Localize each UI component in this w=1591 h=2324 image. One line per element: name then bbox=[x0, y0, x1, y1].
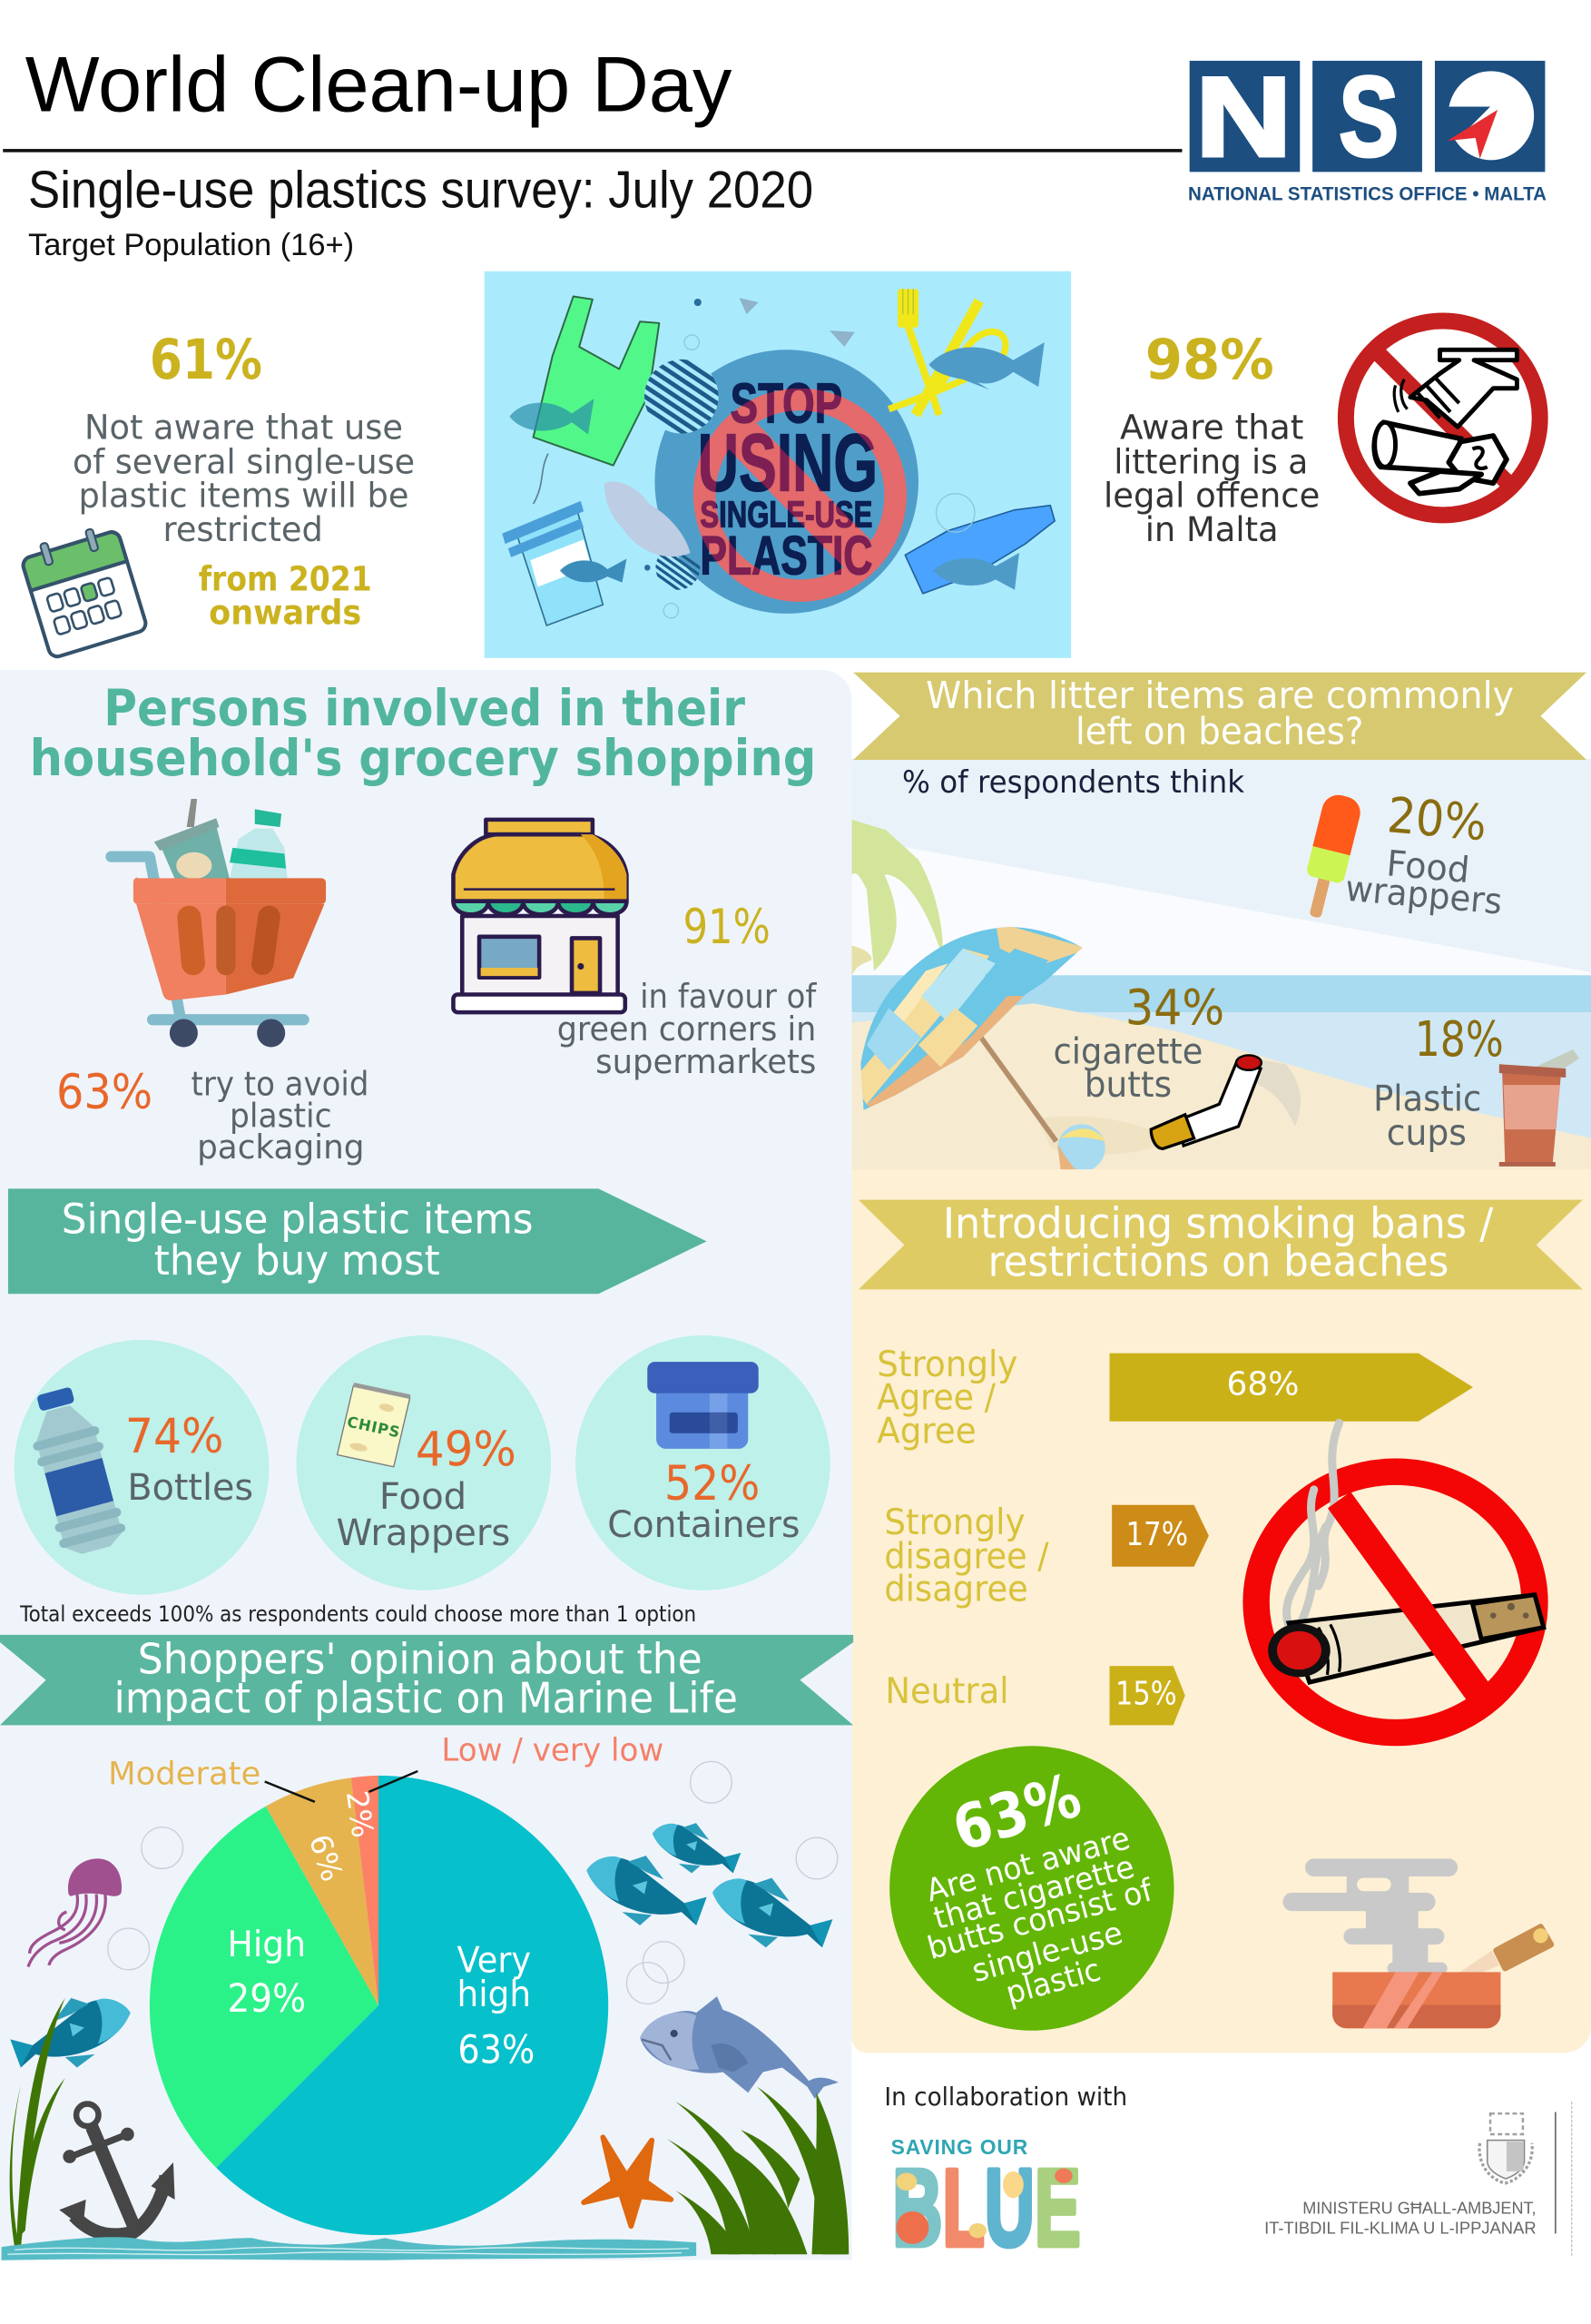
heading: litter ribbon bbox=[853, 673, 1586, 760]
slogan: PLASTIC bbox=[700, 525, 872, 586]
slice: moderate 6% bbox=[266, 1777, 378, 2005]
bar row: disagree 17%: Strongly bbox=[884, 1502, 1025, 1543]
item: containers bbox=[575, 1335, 830, 1590]
NSO logo: S bbox=[1340, 54, 1399, 180]
stat: 91% green corners: green corners in bbox=[557, 1009, 816, 1049]
fish top right bbox=[928, 342, 1045, 389]
text: 34% cigarette butts: cigarette bbox=[1054, 1031, 1203, 1072]
bar row: agree 68%: Agree / bbox=[877, 1378, 997, 1419]
heading: litter ribbon: Which litter items are commonly bbox=[926, 674, 1514, 717]
stat: 61% not aware: of several single-use bbox=[73, 442, 415, 482]
slice: low 2% bbox=[351, 1776, 378, 2005]
heading ribbon: smoking bans: Introducing smoking bans / bbox=[943, 1198, 1494, 1247]
stat: 91% green corners: supermarkets bbox=[595, 1042, 816, 1081]
item: food wrappers bbox=[296, 1335, 551, 1590]
icon: ice lolly bbox=[1296, 792, 1364, 921]
icon: coat of arms bbox=[1479, 2113, 1532, 2183]
stat: 63% avoid plastic: 63% bbox=[56, 1066, 152, 1120]
callout: 63% not aware: plastic bbox=[1002, 1952, 1105, 2012]
stat: 61% not aware: 61% bbox=[150, 329, 262, 392]
text: 34% cigarette butts: 34% bbox=[1125, 979, 1224, 1036]
item: food wrappers: Food bbox=[379, 1476, 466, 1518]
icon: ashtray bbox=[1282, 1858, 1551, 2028]
bar row: disagree 17%: 17% bbox=[1125, 1516, 1188, 1553]
heading ribbon: marine life: impact of plastic on Marine Life bbox=[114, 1674, 738, 1723]
heading: litter ribbon: left on beaches? bbox=[1075, 710, 1363, 753]
text: 34% cigarette butts bbox=[1054, 979, 1224, 1106]
item: bottles: 74% bbox=[125, 1410, 223, 1464]
heading ribbon: smoking bans bbox=[859, 1198, 1583, 1289]
sea bbox=[852, 975, 1591, 1012]
icon: shopping cart bbox=[111, 799, 326, 1047]
fish by cup bbox=[560, 559, 626, 583]
bar row: agree 68%: Strongly bbox=[877, 1344, 1017, 1385]
heading arrow: items they buy: they buy most bbox=[154, 1236, 440, 1285]
label: high: 29% bbox=[228, 1977, 306, 2022]
stat: 98% aware: in Malta bbox=[1145, 509, 1279, 549]
bar row: agree 68%: 68% bbox=[1226, 1365, 1299, 1403]
title: World Clean-up Day bbox=[25, 41, 732, 128]
striped discs bbox=[644, 359, 719, 434]
heading: grocery shopping bbox=[30, 679, 816, 788]
leader lines bbox=[265, 1771, 417, 1802]
panel: beach scene bbox=[851, 759, 1591, 1169]
text: 18% plastic cups: cups bbox=[1387, 1113, 1467, 1154]
title rule bbox=[3, 149, 1183, 153]
single-use cup bbox=[534, 454, 548, 504]
stat: 61% not aware: onwards bbox=[209, 592, 361, 632]
label: moderate: Moderate bbox=[108, 1757, 260, 1793]
icon: cigarette butt bbox=[1151, 1055, 1301, 1148]
text: 20% food wrappers: wrappers bbox=[1344, 869, 1504, 923]
stat: 61% not aware: Not aware that use bbox=[84, 407, 403, 447]
bar row: disagree 17%: disagree / bbox=[884, 1536, 1049, 1577]
label: very high: high bbox=[457, 1974, 531, 2015]
ministry name: IT-TIBDIL FIL-KLIMA U L-IPPJANAR bbox=[1264, 2218, 1537, 2237]
stat: 63% avoid plastic: try to avoid bbox=[192, 1065, 368, 1104]
text: 20% food wrappers bbox=[1344, 786, 1504, 923]
stat: 98% aware: legal offence bbox=[1104, 475, 1320, 515]
collaboration label: In collaboration with bbox=[884, 2082, 1127, 2112]
bar row: agree 68%: Agree bbox=[877, 1412, 977, 1452]
stat: 61% not aware bbox=[73, 329, 415, 632]
icon: store bbox=[453, 820, 626, 1012]
label: low very low: Low / very low bbox=[441, 1733, 663, 1769]
fish by bottle bbox=[933, 553, 1019, 590]
stat: 61% not aware: restricted bbox=[163, 509, 323, 549]
beach ball shadow bbox=[1038, 1117, 1155, 1155]
label: 2%: 2% bbox=[339, 1788, 380, 1840]
text: 20% food wrappers: Food bbox=[1385, 843, 1471, 891]
heading ribbon: marine life bbox=[0, 1634, 853, 1725]
bar row: neutral 15% bbox=[885, 1666, 1185, 1725]
icon: jellyfish bbox=[28, 1858, 122, 1967]
cutlery bbox=[889, 289, 1006, 415]
heading arrow: items they buy: Single-use plastic items bbox=[62, 1195, 534, 1243]
note: % of respondents: % of respondents think bbox=[902, 764, 1245, 800]
callout: 63% not aware bbox=[889, 1746, 1174, 2031]
pie chart: impact on marine life bbox=[108, 1733, 663, 2235]
slogan: USING bbox=[698, 418, 878, 508]
text: 18% plastic cups bbox=[1373, 1010, 1504, 1154]
callout: 63% not aware: butts consist of bbox=[924, 1872, 1157, 1967]
bar row: disagree 17%: disagree bbox=[884, 1569, 1028, 1610]
heading ribbon: smoking bans: restrictions on beaches bbox=[988, 1237, 1449, 1286]
text: 18% plastic cups: 18% bbox=[1415, 1010, 1504, 1068]
item: containers: 52% bbox=[664, 1457, 760, 1512]
icon: seaweed right bbox=[666, 2087, 849, 2254]
heading: grocery shopping: household's grocery shopping bbox=[30, 729, 816, 788]
stat: 98% aware bbox=[1104, 329, 1320, 549]
callout: 63% not aware: that cigarette bbox=[930, 1849, 1138, 1937]
item: food wrappers: Wrappers bbox=[337, 1512, 510, 1554]
icon: calendar bbox=[18, 521, 148, 659]
ministry name: MINISTERU GĦALL-AMBJENT, bbox=[1302, 2199, 1537, 2218]
stat: 63% avoid plastic: packaging bbox=[197, 1128, 365, 1167]
plastic bottle bbox=[905, 506, 1055, 594]
icon: starfish bbox=[584, 2137, 671, 2226]
text: 18% plastic cups: Plastic bbox=[1373, 1079, 1481, 1120]
text: 34% cigarette butts: butts bbox=[1085, 1065, 1172, 1106]
text: 20% food wrappers: 20% bbox=[1385, 786, 1489, 852]
central image: stop using single-use plastic bbox=[485, 271, 1071, 658]
item: food wrappers: CHIPS bbox=[346, 1413, 401, 1441]
item: food wrappers: 49% bbox=[416, 1423, 516, 1478]
heading arrow: items they buy bbox=[8, 1188, 707, 1294]
fish in bag bbox=[509, 399, 594, 434]
leaf bbox=[604, 482, 691, 556]
item: bottles bbox=[15, 1340, 269, 1595]
stat: 63% avoid plastic bbox=[56, 1065, 368, 1167]
label: high bbox=[228, 1925, 306, 2022]
label: very high bbox=[457, 1940, 535, 2073]
stat: 61% not aware: plastic items will be bbox=[79, 475, 408, 515]
icon: school of fish bbox=[586, 1823, 832, 1947]
stat: 91% green corners: in favour of bbox=[640, 977, 817, 1016]
callout: 63% not aware: Are not aware bbox=[923, 1820, 1134, 1909]
panel: left background bbox=[0, 670, 852, 2260]
slogan bbox=[698, 372, 878, 586]
bar row: disagree 17% bbox=[884, 1502, 1209, 1610]
sky diagonal bbox=[852, 837, 1591, 979]
subtitle: Single-use plastics survey: July 2020 bbox=[28, 162, 813, 220]
NSO logo: N bbox=[1195, 54, 1291, 180]
callout: 63% not aware: 63% bbox=[945, 1759, 1088, 1866]
icon: fish left bbox=[10, 1998, 131, 2068]
item: containers: Containers bbox=[607, 1504, 800, 1546]
umbrella canopy bbox=[860, 927, 1083, 1110]
heading: grocery shopping: Persons involved in their bbox=[103, 679, 746, 738]
slice: very high 63% bbox=[216, 1776, 608, 2235]
water strip bbox=[2, 2237, 696, 2260]
plastic bag bbox=[534, 297, 659, 466]
stat: 63% avoid plastic: plastic bbox=[230, 1097, 332, 1136]
ministry name bbox=[1264, 2199, 1537, 2237]
footnote: Total exceeds 100% as respondents could choose more than 1 option bbox=[19, 1601, 696, 1627]
plate bbox=[654, 350, 918, 614]
bar row: agree 68% bbox=[877, 1344, 1473, 1452]
item: bottles: Bottles bbox=[127, 1467, 253, 1509]
heading ribbon: marine life: Shoppers' opinion about the bbox=[138, 1634, 702, 1683]
beach ball bbox=[1057, 1124, 1105, 1172]
stat: 98% aware: Aware that bbox=[1120, 407, 1303, 447]
bar row: neutral 15%: Neutral bbox=[885, 1671, 1009, 1712]
decorative bubbles bbox=[108, 1761, 838, 2004]
stat: 91% green corners: 91% bbox=[683, 901, 771, 955]
target population note: Target Population (16+) bbox=[28, 228, 354, 262]
icon: anchor bbox=[59, 2104, 175, 2235]
label: very high: Very bbox=[457, 1940, 531, 1981]
stat: 91% green corners bbox=[557, 901, 817, 1081]
NSO logo bbox=[1188, 54, 1547, 204]
icon: no smoking sign bbox=[1256, 1423, 1544, 1733]
label: 6%: 6% bbox=[302, 1830, 349, 1886]
slogan: SINGLE-USE bbox=[700, 494, 872, 536]
palm bbox=[852, 820, 943, 970]
icon: plastic cup bbox=[1499, 1049, 1579, 1167]
stat: 61% not aware: from 2021 bbox=[199, 559, 372, 599]
slogan: STOP bbox=[731, 372, 842, 435]
stat: 98% aware: 98% bbox=[1145, 329, 1274, 392]
icon: no littering sign bbox=[1346, 320, 1540, 515]
stat: 98% aware: littering is a bbox=[1114, 442, 1308, 482]
ministry divider bbox=[1555, 2102, 1572, 2258]
label: high: High bbox=[228, 1925, 306, 1965]
icon: seaweed left bbox=[10, 1998, 65, 2249]
NSO logo: NATIONAL STATISTICS OFFICE • MALTA bbox=[1188, 183, 1547, 204]
logo: saving our blue: SAVING OUR bbox=[891, 2135, 1028, 2159]
umbrella pole bbox=[980, 1037, 1058, 1143]
paper planes and dots bbox=[739, 298, 759, 314]
label: very high: 63% bbox=[457, 2029, 535, 2073]
panel: smoking background bbox=[852, 1169, 1591, 2053]
icon: sad fish bbox=[640, 1996, 839, 2099]
bar row: neutral 15%: 15% bbox=[1115, 1676, 1177, 1713]
callout: 63% not aware: single-use bbox=[968, 1915, 1126, 1990]
sand bbox=[852, 1003, 1591, 1171]
logo: saving our blue: BLUE bbox=[892, 2146, 1081, 2269]
slice: high 29% bbox=[150, 1807, 378, 2168]
